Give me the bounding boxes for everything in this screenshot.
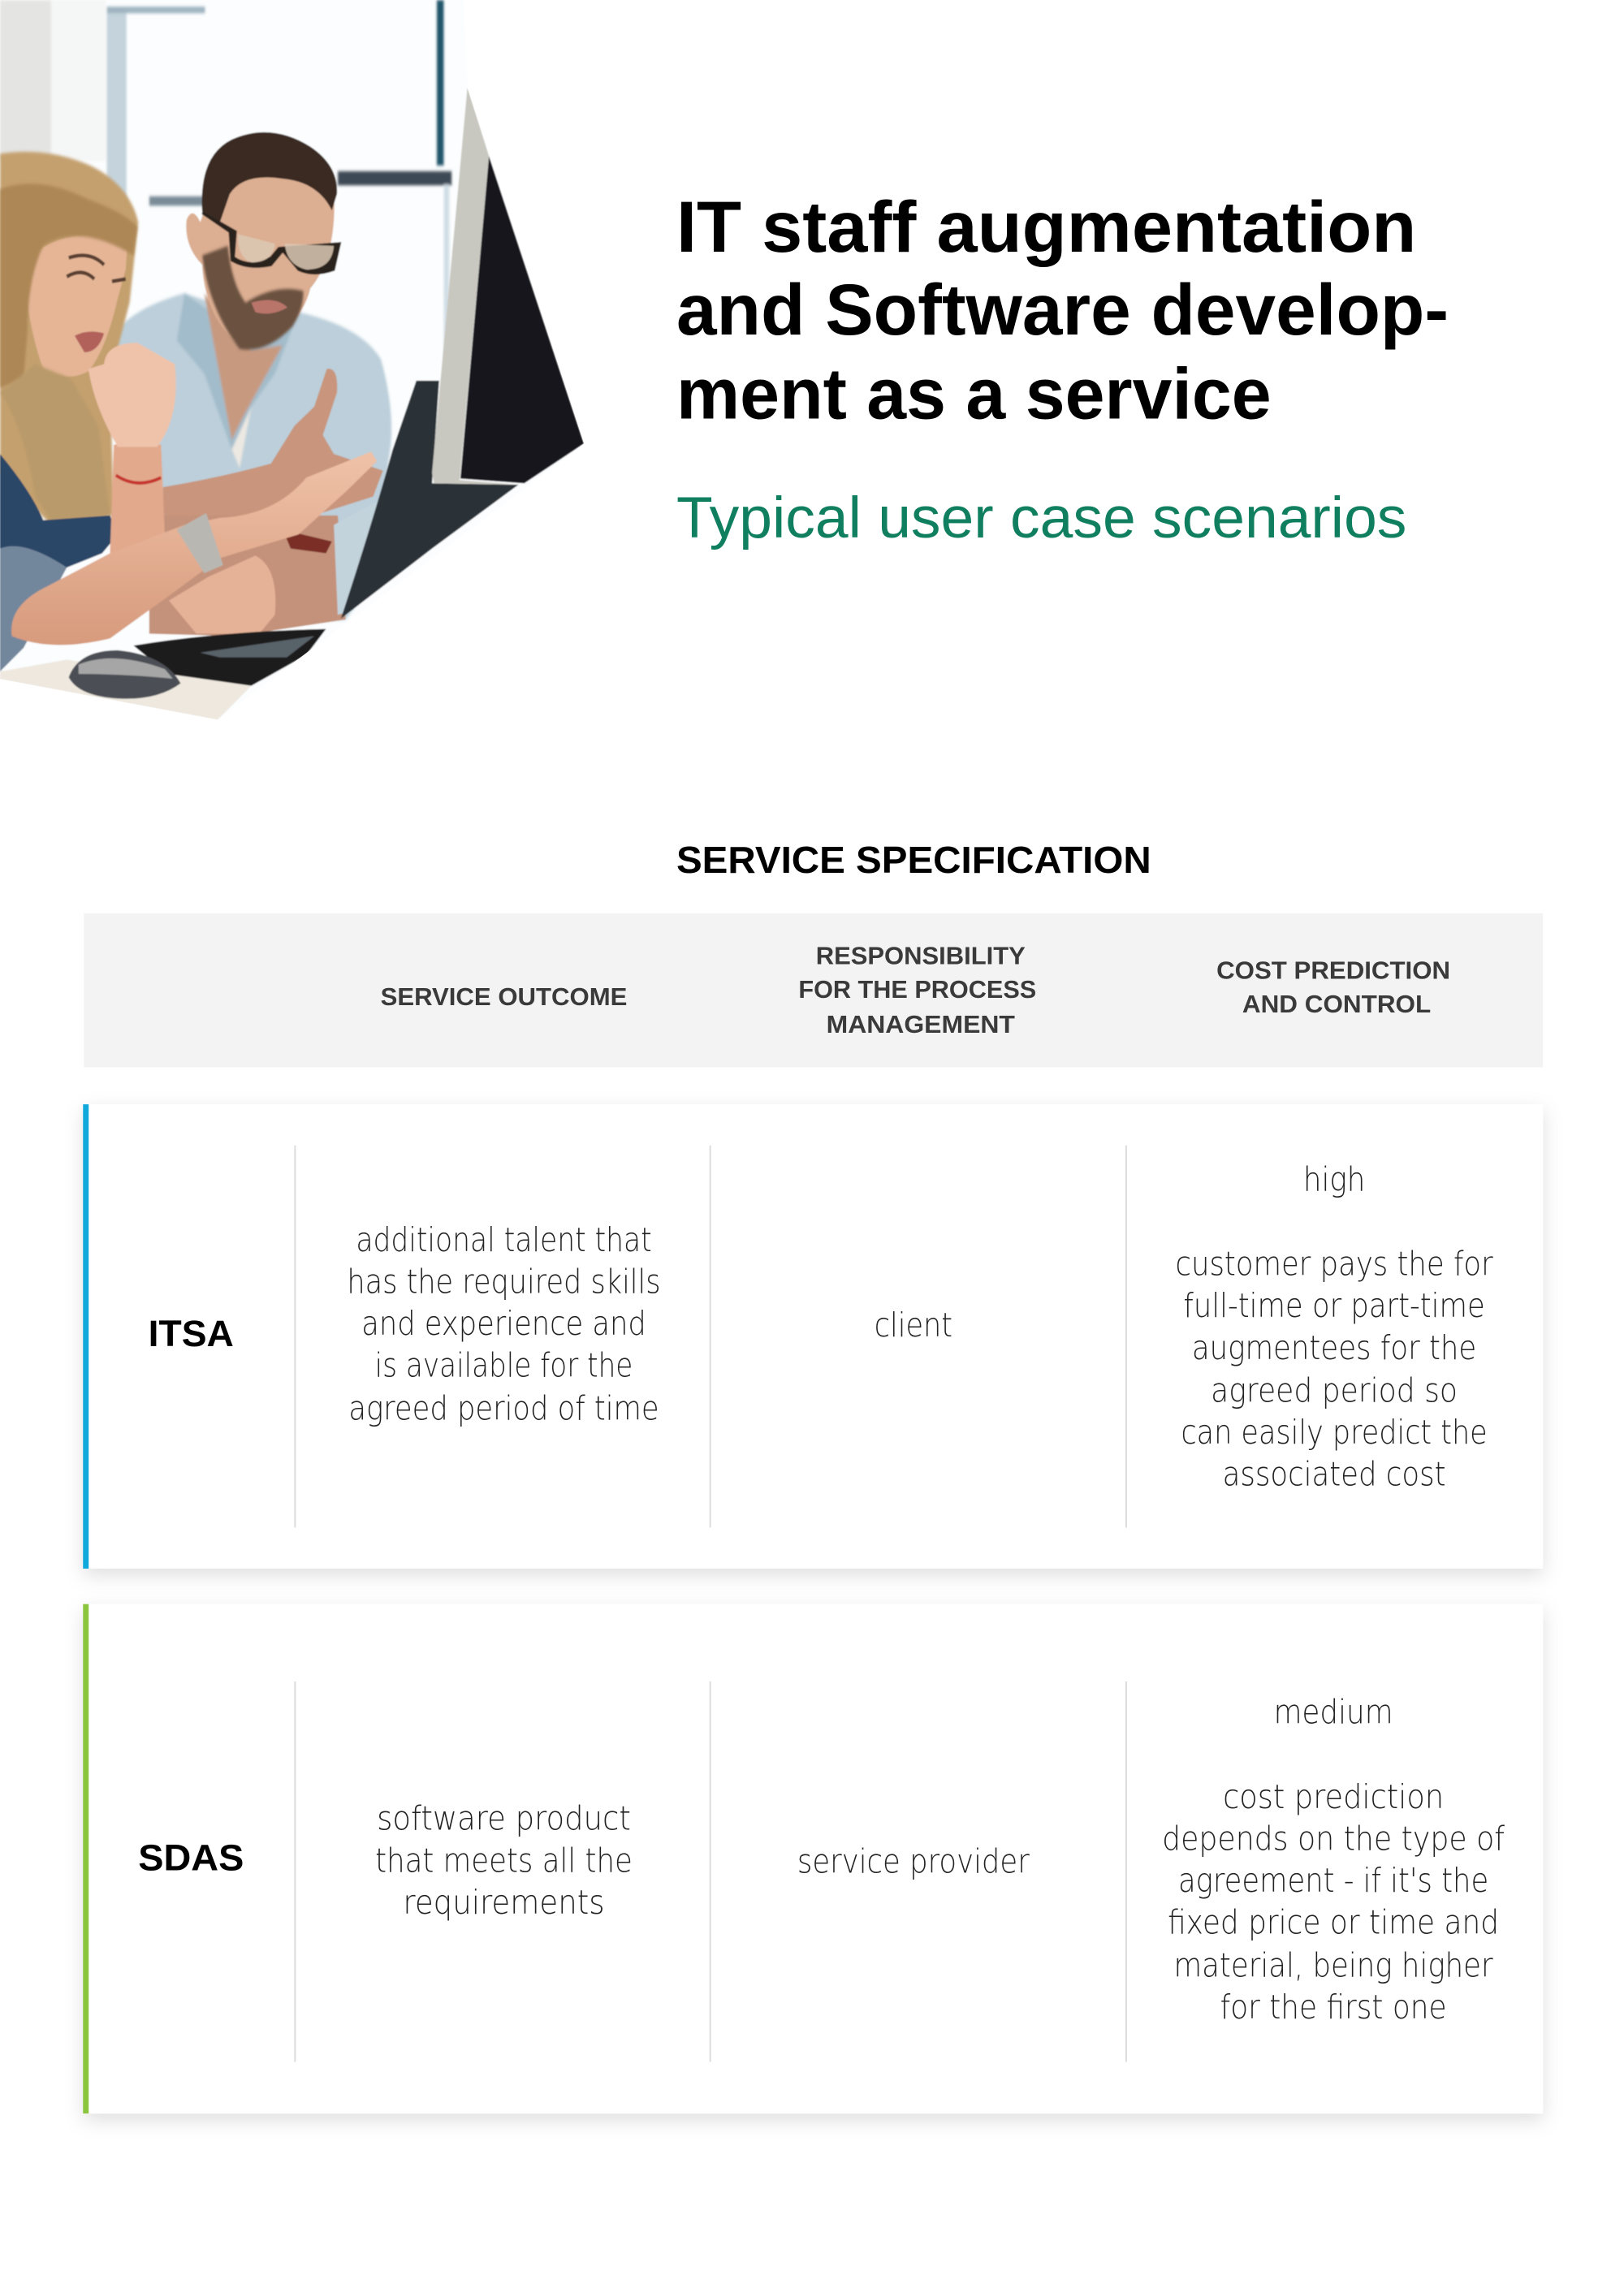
column header: cost prediction: COST PREDICTION bbox=[1216, 956, 1450, 984]
title: ment as a service bbox=[676, 352, 1272, 434]
table header bbox=[84, 913, 1543, 1067]
cost text: cost prediction bbox=[1223, 1777, 1444, 1816]
man's gesturing hand and forearm bbox=[163, 369, 383, 518]
wristwatch bbox=[177, 513, 223, 573]
service outcome text: agreed period of time bbox=[348, 1388, 659, 1427]
section heading: SERVICE SPECIFICATION bbox=[676, 839, 1151, 881]
cost text bbox=[1162, 1693, 1505, 2027]
service outcome text: additional talent that bbox=[356, 1220, 652, 1259]
title bbox=[676, 186, 1449, 434]
service outcome text: requirements bbox=[403, 1883, 605, 1922]
cost text: can easily predict the bbox=[1181, 1413, 1488, 1452]
woman's lower hand bbox=[169, 555, 275, 634]
cost text: fixed price or time and bbox=[1168, 1903, 1499, 1942]
cost text bbox=[1176, 1159, 1493, 1494]
desk and mouse bbox=[0, 650, 252, 720]
panel: ITSA row bbox=[83, 1104, 1543, 1569]
cost text: augmentees for the bbox=[1192, 1328, 1476, 1367]
column header: service outcome: SERVICE OUTCOME bbox=[381, 982, 627, 1011]
cost text: full-time or part-time bbox=[1183, 1286, 1485, 1325]
photo: two colleagues at a computer bbox=[0, 0, 613, 741]
cost text: customer pays the for bbox=[1176, 1245, 1493, 1284]
cost text: material, being higher bbox=[1174, 1945, 1493, 1984]
man bbox=[106, 132, 391, 636]
service outcome text bbox=[375, 1799, 633, 1922]
cost text: agreed period so bbox=[1211, 1371, 1458, 1409]
column header: responsibility: FOR THE PROCESS bbox=[798, 975, 1036, 1004]
column header: cost prediction bbox=[1216, 956, 1450, 1018]
panel: SDAS row bbox=[83, 1604, 1543, 2113]
cost text: for the first one bbox=[1220, 1988, 1447, 2027]
woman bbox=[0, 152, 377, 671]
subtitle: Typical user case scenarios bbox=[676, 486, 1406, 550]
cost text: medium bbox=[1274, 1693, 1393, 1732]
service outcome text bbox=[347, 1220, 661, 1427]
cost text: high bbox=[1303, 1159, 1365, 1198]
column header: responsibility: MANAGEMENT bbox=[827, 1010, 1015, 1038]
column header: cost prediction: AND CONTROL bbox=[1242, 990, 1431, 1018]
service outcome text: and experience and bbox=[361, 1304, 646, 1343]
column header: responsibility: RESPONSIBILITY bbox=[816, 941, 1026, 969]
service outcome text: software product bbox=[377, 1799, 631, 1838]
service outcome text: is available for the bbox=[375, 1346, 633, 1385]
cost text: depends on the type of bbox=[1162, 1819, 1505, 1858]
row label: SDAS: SDAS bbox=[138, 1837, 244, 1878]
responsibility text: client bbox=[875, 1306, 952, 1345]
row label: ITSA: ITSA bbox=[149, 1313, 234, 1354]
title: and Software develop- bbox=[676, 269, 1449, 350]
responsibility text: service provider bbox=[797, 1841, 1030, 1880]
service outcome text: has the required skills bbox=[347, 1262, 661, 1301]
cost text: agreement - if it's the bbox=[1178, 1861, 1488, 1900]
service outcome text: that meets all the bbox=[375, 1841, 633, 1880]
column header: responsibility bbox=[798, 941, 1036, 1038]
laptop and monitor bbox=[133, 88, 584, 686]
title: IT staff augmentation bbox=[676, 186, 1416, 267]
cost text: associated cost bbox=[1223, 1455, 1446, 1494]
